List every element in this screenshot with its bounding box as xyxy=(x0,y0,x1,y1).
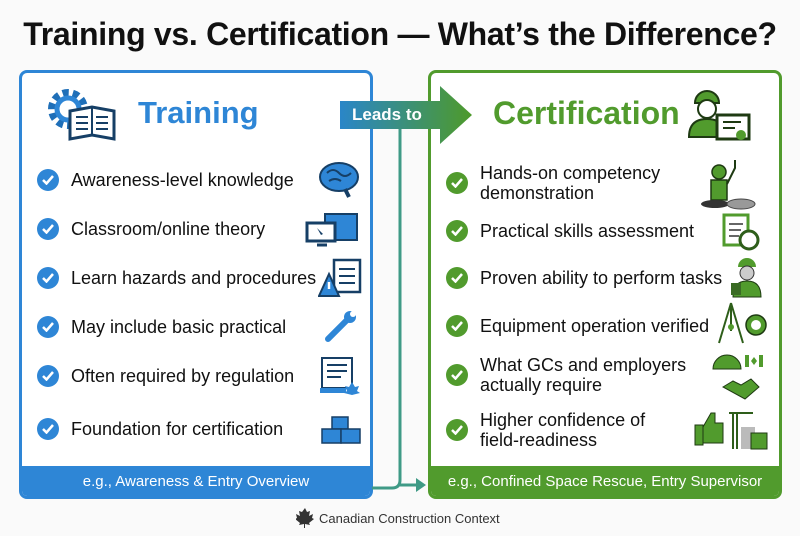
band: certification example xyxy=(431,466,779,496)
arrow: connector xyxy=(372,129,426,492)
item 5: What GCs and employers xyxy=(480,355,686,375)
item 3: Learn hazards and procedures xyxy=(71,268,316,288)
icon: gear and book xyxy=(48,89,116,141)
item 1: Awareness-level knowledge xyxy=(71,170,294,190)
icon: wrench xyxy=(325,311,356,342)
panel: certification xyxy=(428,70,782,499)
band: certification example: e.g., Confined Space Rescue, Entry Supervisor xyxy=(448,473,762,490)
title: Training vs. Certification — What’s the Difference? xyxy=(23,16,777,52)
heading: training: Training xyxy=(138,95,259,130)
item 2: Classroom/online theory xyxy=(71,219,265,239)
item 3: Proven ability to perform tasks xyxy=(480,268,722,288)
item 6: field-readiness xyxy=(480,430,597,450)
icon: worker with respirator xyxy=(731,258,762,298)
icon: blocks xyxy=(321,416,361,444)
panel: training xyxy=(19,70,373,499)
heading: certification: Certification xyxy=(493,95,680,131)
icon: maple leaf xyxy=(296,508,314,528)
icon: brain xyxy=(319,162,359,198)
icon: screens xyxy=(306,213,358,246)
item 5: Often required by regulation xyxy=(71,366,294,386)
item 4: Equipment operation verified xyxy=(480,316,709,336)
item 6: Foundation for certification xyxy=(71,419,283,439)
arrow: leads to: Leads to xyxy=(352,105,422,124)
item 1: demonstration xyxy=(480,183,594,203)
icon: clipboard warning xyxy=(318,258,362,297)
band: training example: e.g., Awareness & Entry Overview xyxy=(83,473,309,490)
icon: document with maple leaf xyxy=(320,357,360,395)
icon: thumbs up and crane xyxy=(694,412,768,450)
footer: canadian context xyxy=(296,508,500,528)
icon: worker with certificate xyxy=(688,90,750,140)
item 1 xyxy=(446,163,660,203)
icon: tripod and fan xyxy=(718,302,767,344)
item 1: Hands-on competency xyxy=(480,163,660,183)
item 5: actually require xyxy=(480,375,602,395)
item 2: Practical skills assessment xyxy=(480,221,694,241)
band: training example xyxy=(22,466,370,496)
item 4: May include basic practical xyxy=(71,317,286,337)
item 6 xyxy=(446,410,646,450)
item 5 xyxy=(446,355,686,395)
footer: canadian context: Canadian Construction Context xyxy=(319,510,500,526)
arrow: leads to xyxy=(340,86,472,144)
icon: clipboard stopwatch xyxy=(722,214,760,250)
icon: hardhat flag handshake xyxy=(712,354,763,400)
item 6: Higher confidence of xyxy=(480,410,645,430)
icon: worker in manhole xyxy=(701,160,756,210)
